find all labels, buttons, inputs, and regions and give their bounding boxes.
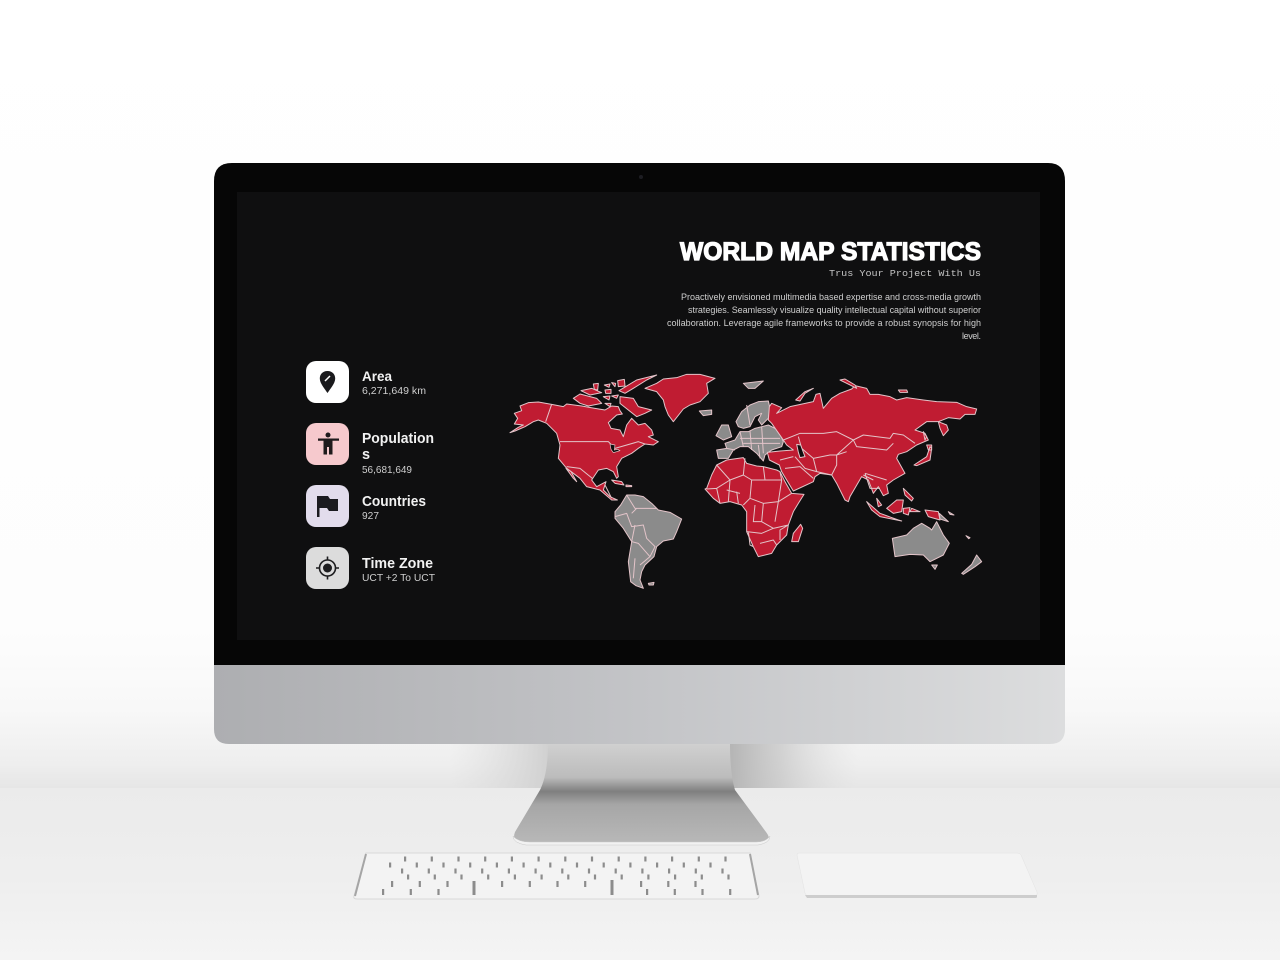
keyboard bbox=[354, 853, 759, 899]
caspian sea bbox=[797, 444, 805, 458]
europe bbox=[699, 381, 783, 461]
australia bbox=[892, 522, 949, 562]
europe borders bbox=[727, 405, 780, 458]
monitor bbox=[214, 163, 1065, 744]
arctic russian islands bbox=[796, 379, 857, 401]
stat: time zone bbox=[306, 547, 436, 589]
stat: populations bbox=[306, 423, 434, 476]
icon: flag bbox=[306, 485, 349, 527]
time zone label: Time Zone bbox=[362, 556, 433, 572]
greenland and south america bbox=[612, 374, 715, 588]
scandinavia bbox=[736, 401, 770, 428]
trackpad bbox=[797, 853, 1037, 898]
stat: area bbox=[306, 361, 426, 403]
baja california bbox=[566, 468, 577, 482]
icon: map pin bbox=[306, 361, 349, 403]
stat: countries bbox=[306, 485, 426, 527]
greenland bbox=[645, 374, 715, 422]
description paragraph: strategies. Seamlessly visualize quality intellectual capital without superior bbox=[688, 305, 981, 315]
great lakes bbox=[610, 444, 620, 453]
north america bbox=[510, 375, 658, 500]
world map bbox=[510, 374, 982, 588]
europe mainland bbox=[717, 425, 783, 461]
area label: Area bbox=[362, 368, 392, 384]
caribbean islands bbox=[612, 480, 632, 487]
north america mainland bbox=[510, 402, 658, 500]
madagascar bbox=[792, 524, 803, 542]
monitor stand bbox=[513, 743, 770, 845]
new guinea bbox=[925, 510, 940, 520]
iceland bbox=[699, 410, 712, 416]
area value: 6,271,649 km bbox=[362, 385, 426, 397]
africa borders bbox=[707, 458, 792, 547]
stand shadow on wall bbox=[450, 744, 859, 788]
camera bbox=[639, 175, 643, 179]
description paragraph bbox=[667, 292, 981, 341]
pacific islands bbox=[948, 512, 970, 539]
south america borders bbox=[615, 495, 657, 578]
kamchatka islands bbox=[898, 390, 908, 392]
tasmania bbox=[932, 565, 937, 569]
keyboard key gaps bbox=[355, 854, 758, 896]
title: WORLD MAP STATISTICS bbox=[680, 238, 981, 266]
icon: person bbox=[306, 423, 349, 465]
us and mexico borders bbox=[546, 404, 645, 498]
south america bbox=[615, 495, 682, 588]
new zealand bbox=[962, 555, 982, 574]
populations value: 56,681,649 bbox=[362, 464, 412, 476]
monitor chin bbox=[214, 665, 1065, 744]
populations label: Population bbox=[362, 431, 434, 447]
canadian arctic islands bbox=[573, 375, 657, 417]
africa bbox=[705, 458, 804, 557]
countries label: Countries bbox=[362, 494, 426, 510]
icon: target bbox=[306, 547, 349, 589]
monitor body bbox=[214, 163, 1065, 665]
old world bbox=[705, 379, 982, 574]
united kingdom bbox=[716, 425, 732, 440]
screen slide bbox=[237, 192, 1040, 640]
svalbard bbox=[743, 381, 763, 388]
description paragraph: collaboration. Leverage agile frameworks to provide a robust synopsis for high bbox=[667, 318, 981, 328]
subtitle: Trus Your Project With Us bbox=[829, 268, 981, 279]
russia and asia bbox=[767, 386, 977, 502]
falklands bbox=[648, 582, 654, 585]
stat: populations: s bbox=[362, 447, 370, 463]
keyboard body bbox=[354, 853, 759, 899]
countries value: 927 bbox=[362, 510, 379, 522]
asia borders bbox=[780, 432, 915, 488]
japan bbox=[914, 432, 932, 466]
description paragraph: level. bbox=[962, 331, 981, 341]
description paragraph: Proactively envisioned multimedia based expertise and cross-media growth bbox=[681, 292, 981, 302]
southeast asia islands bbox=[867, 488, 920, 521]
desk surface bbox=[0, 788, 1280, 960]
time zone value: UCT +2 To UCT bbox=[362, 572, 436, 584]
